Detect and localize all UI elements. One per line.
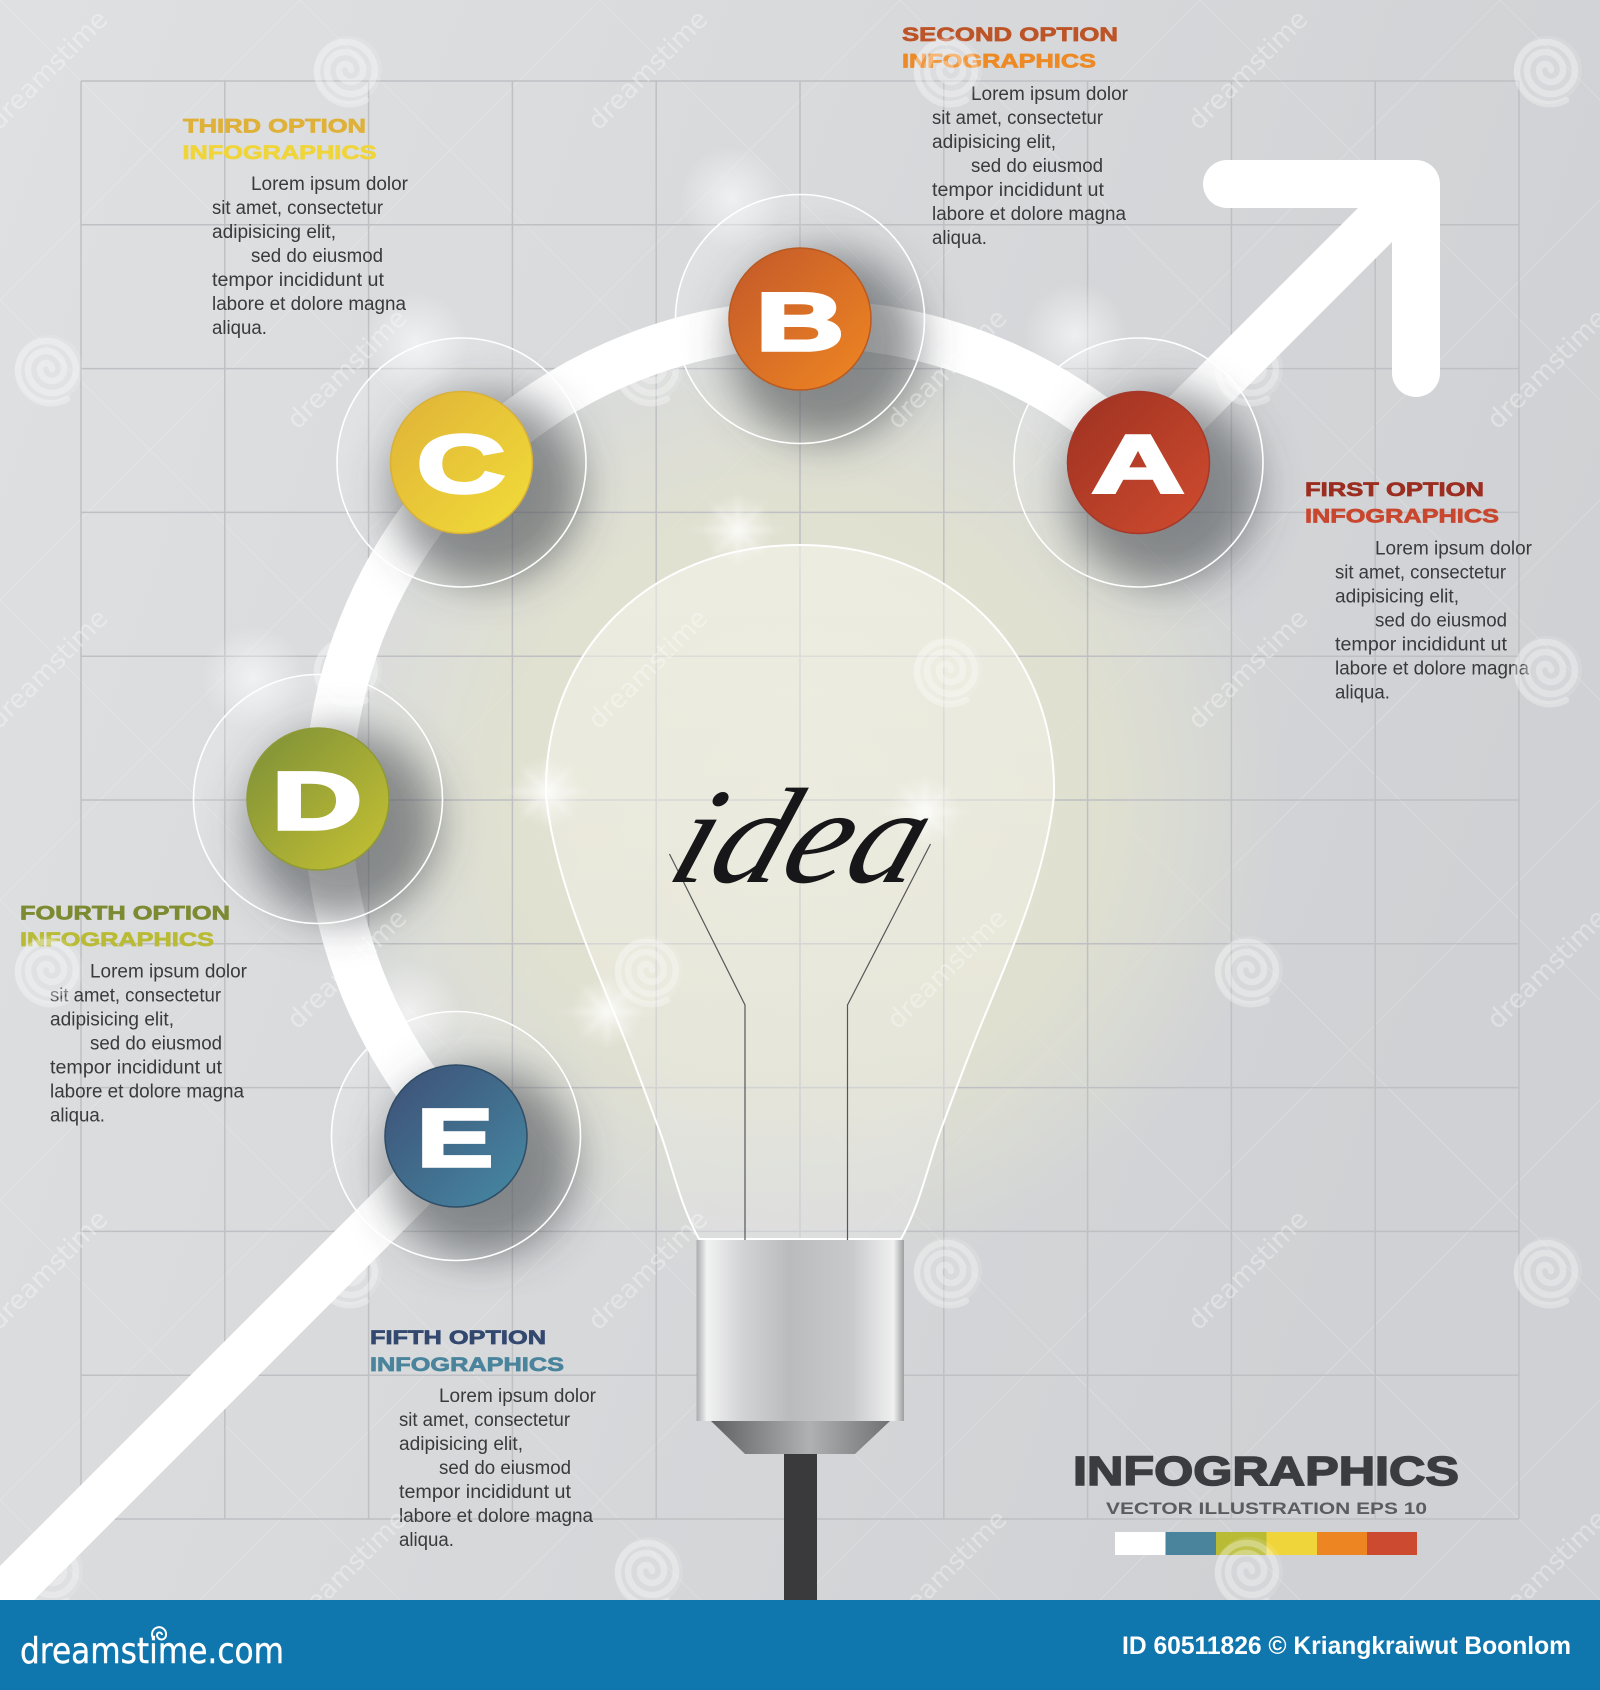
text block: first option: labore et dolore magna: [1335, 658, 1529, 680]
text block: fifth option: aliqua.: [399, 1530, 454, 1551]
filament wires: [670, 844, 930, 1240]
text block: first option: INFOGRAPHICS: [1305, 506, 1499, 528]
option circle C: [337, 292, 586, 587]
text block: fourth option: FOURTH OPTION: [20, 904, 230, 924]
text block: first option: adipisicing elit,: [1335, 586, 1459, 608]
watermark text: dreamstime: [882, 904, 1013, 1035]
text block: fifth option: adipisicing elit,: [399, 1434, 523, 1455]
text block: fourth option: adipisicing elit,: [50, 1010, 174, 1030]
flare near top: [686, 490, 790, 570]
text block: fifth option: sed do eiusmod: [439, 1458, 571, 1479]
option circle E: E: [417, 1093, 493, 1184]
text block: fifth option: FIFTH OPTION: [370, 1328, 546, 1349]
text block: first option: aliqua.: [1335, 682, 1390, 704]
text block: fifth option: tempor incididunt ut: [399, 1482, 572, 1503]
text block: fifth option: labore et dolore magna: [399, 1506, 593, 1527]
base cone: [711, 1421, 890, 1454]
light bulb: [495, 490, 1054, 1600]
text block: first option: [1305, 480, 1533, 704]
text block: third option: adipisicing elit,: [212, 222, 336, 243]
bulb glass: [546, 545, 1054, 1239]
text block: second option: adipisicing elit,: [932, 132, 1056, 153]
text block: third option: tempor incididunt ut: [212, 270, 385, 291]
text block: fourth option: [20, 904, 248, 1126]
text block: first option: FIRST OPTION: [1305, 480, 1484, 501]
watermark text: dreamstime: [282, 1505, 413, 1636]
text block: fifth option: INFOGRAPHICS: [370, 1355, 564, 1376]
option circle E: [332, 961, 580, 1260]
text block: third option: labore et dolore magna: [212, 294, 406, 315]
text block: second option: [902, 25, 1129, 249]
option circle C: C: [417, 419, 505, 510]
option circle D: [194, 626, 442, 924]
text block: second option: Lorem ipsum dolor: [971, 84, 1129, 105]
option circle A: [1014, 283, 1263, 587]
text block: third option: INFOGRAPHICS: [182, 143, 376, 164]
flare left: [495, 752, 599, 832]
watermark text: dreamstime: [282, 304, 413, 435]
power cord: [784, 1454, 817, 1600]
text block: fifth option: sit amet, consectetur: [399, 1410, 571, 1431]
text block: first option: sed do eiusmod: [1375, 610, 1507, 632]
text block: third option: sed do eiusmod: [251, 246, 383, 267]
arrow head: [1227, 184, 1416, 373]
text block: second option: INFOGRAPHICS: [902, 52, 1096, 72]
text block: third option: aliqua.: [212, 318, 267, 339]
text block: third option: Lorem ipsum dolor: [251, 174, 409, 195]
option circle B: B: [756, 277, 844, 368]
watermark text: dreamstime: [583, 5, 714, 136]
text block: fifth option: Lorem ipsum dolor: [439, 1386, 597, 1407]
footer logo: dreamstime.com: [20, 1631, 284, 1672]
bulb glow: [320, 320, 1280, 1280]
text block: fourth option: aliqua.: [50, 1106, 105, 1126]
image credit: ID 60511826 © Kriangkraiwut Boonlom: [1122, 1632, 1571, 1660]
text block: first option: sit amet, consectetur: [1335, 562, 1507, 584]
text block: second option: tempor incididunt ut: [932, 180, 1105, 201]
flare lower left: [555, 972, 659, 1052]
text block: second option: aliqua.: [932, 228, 987, 249]
text block: second option: SECOND OPTION: [902, 25, 1118, 46]
text block: fourth option: labore et dolore magna: [50, 1082, 244, 1102]
idea word: idea: [654, 762, 953, 912]
text block: fourth option: sit amet, consectetur: [50, 986, 222, 1006]
text block: second option: sit amet, consectetur: [932, 108, 1104, 129]
white arrow path: [0, 184, 1416, 1640]
text block: second option: sed do eiusmod: [971, 156, 1103, 177]
watermark text: dreamstime: [1183, 604, 1314, 735]
footer band: [0, 1600, 1600, 1690]
watermark text: dreamstime: [583, 604, 714, 735]
watermark text: dreamstime: [1183, 5, 1314, 136]
text block: fourth option: tempor incididunt ut: [50, 1058, 223, 1078]
bulb screw base: [696, 1240, 904, 1421]
text block: third option: sit amet, consectetur: [212, 198, 384, 219]
watermark text: dreamstime: [583, 1205, 714, 1336]
lower left tail: [0, 1144, 456, 1640]
main title block: [1073, 1448, 1459, 1555]
subtitle: VECTOR ILLUSTRATION EPS 10: [1106, 1499, 1427, 1518]
text block: third option: THIRD OPTION: [183, 116, 366, 138]
text block: fourth option: Lorem ipsum dolor: [90, 962, 248, 982]
text block: fourth option: INFOGRAPHICS: [20, 930, 214, 951]
title: INFOGRAPHICS: [1073, 1448, 1459, 1494]
arc through the option circles: [328, 324, 1140, 1136]
option circle D: D: [272, 756, 362, 847]
option circle A: A: [1092, 420, 1184, 510]
option circle B: [676, 146, 924, 444]
flare near the word: [873, 772, 977, 852]
colour swatches: [1115, 1532, 1417, 1555]
watermark text: dreamstime: [882, 1505, 1013, 1636]
text block: fifth option: [370, 1328, 597, 1551]
watermark text: dreamstime: [1183, 1205, 1314, 1336]
text block: fourth option: sed do eiusmod: [90, 1034, 222, 1054]
watermark text: dreamstime: [882, 304, 1013, 435]
text block: second option: labore et dolore magna: [932, 204, 1126, 225]
text block: first option: tempor incididunt ut: [1335, 634, 1508, 656]
watermark text: dreamstime: [282, 904, 413, 1035]
text block: first option: Lorem ipsum dolor: [1375, 538, 1533, 560]
text block: third option: [182, 116, 409, 339]
footer logo spiral: [152, 1627, 166, 1640]
arrow shaft, top right: [1138, 184, 1416, 462]
